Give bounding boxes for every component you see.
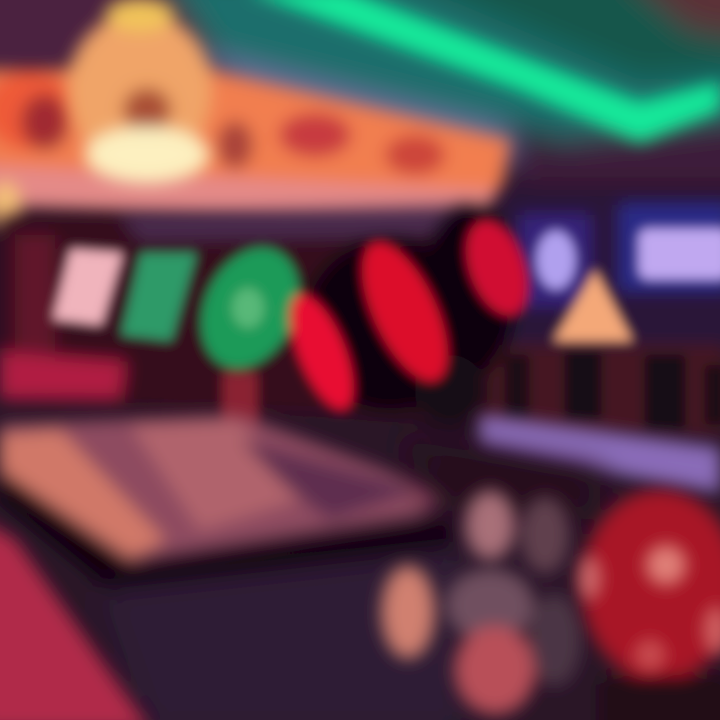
- orange sign band: [0, 70, 510, 225]
- black card backing: [305, 205, 515, 425]
- ceiling: [0, 0, 720, 190]
- red seat at bottom left: [0, 520, 150, 720]
- right wall and screens: [485, 190, 720, 435]
- clock face ornament: [0, 0, 212, 229]
- lavender counter: [480, 415, 720, 492]
- purple screen: [536, 230, 576, 290]
- neon green ceiling stripe: [245, 0, 720, 142]
- cards and chips in the centre: [52, 211, 540, 452]
- red dice: [582, 490, 720, 720]
- lavender screen: [638, 228, 720, 280]
- floor: [100, 440, 600, 720]
- middle dark wall: [0, 205, 520, 420]
- poker chips: [382, 491, 581, 714]
- casino table: [0, 415, 450, 592]
- stools: [505, 355, 529, 420]
- peach lamp: [552, 268, 634, 342]
